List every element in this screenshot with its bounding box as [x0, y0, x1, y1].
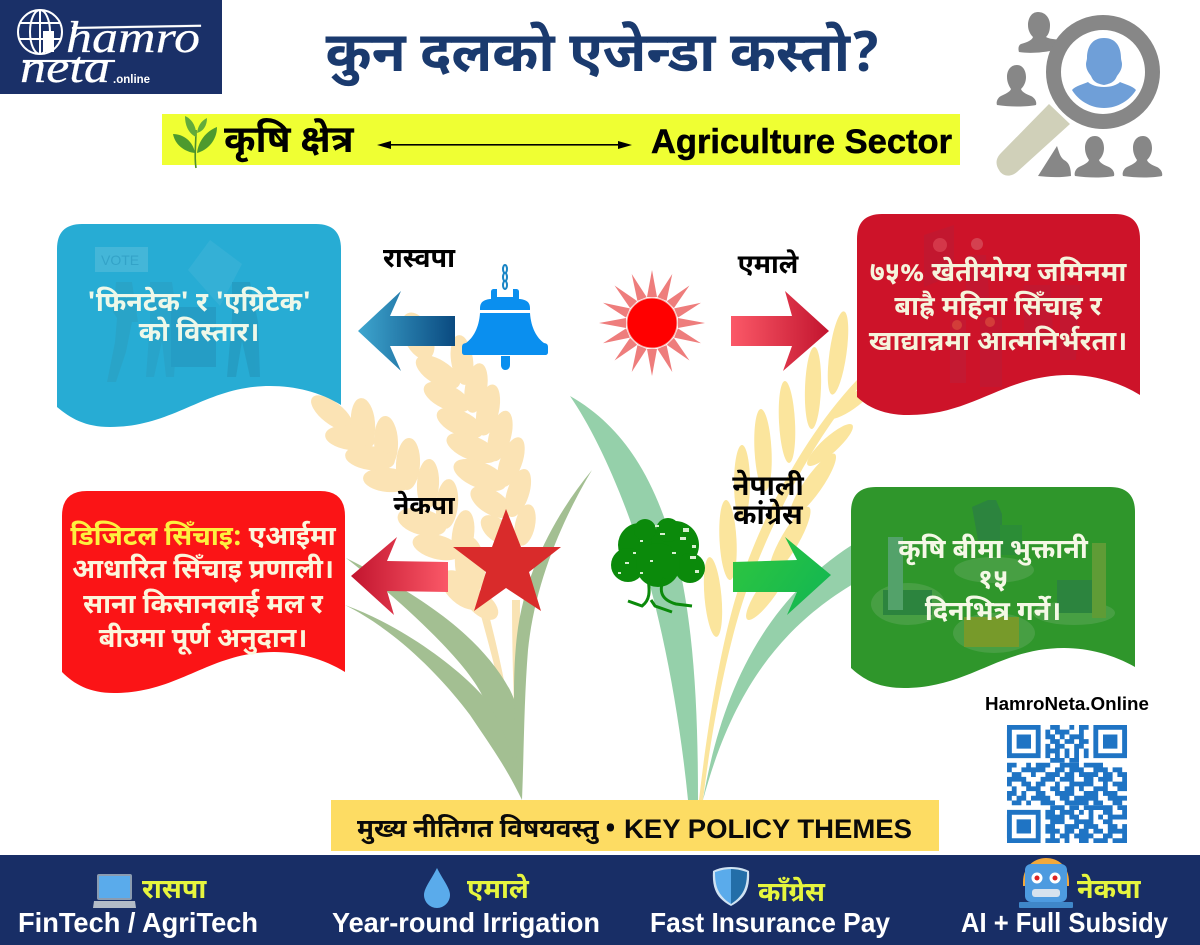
icon: star: [453, 509, 561, 611]
footer item: UML: [332, 868, 600, 938]
left wheat stalks: [478, 600, 520, 760]
label: Congress: कांग्रेस: [733, 497, 804, 536]
left wheat ear A: [396, 309, 538, 549]
panel text: 'फिनटेक' र 'एग्रिटेक': [87, 286, 311, 323]
right wheat stalk and grains: [699, 310, 875, 800]
icon: tree: [611, 518, 705, 612]
icon: bell: [462, 265, 548, 370]
panel text: बीउमा पूर्ण अनुदान।: [99, 622, 307, 659]
logo wordmark: hamro: [66, 13, 200, 62]
sector banner: [162, 114, 960, 168]
background wheat and leaf plant: [307, 309, 875, 800]
logo wordmark: [20, 13, 201, 92]
label: NCP: नेकपा: [393, 491, 456, 525]
footer item: NCP: AI + Full Subsidy: [961, 907, 1168, 938]
icon: leaf sprout: [173, 116, 217, 168]
logo banner: [0, 0, 222, 94]
QR code: [1007, 727, 1127, 841]
footer item: Congress: [650, 867, 890, 938]
icon: water drop: [424, 868, 450, 908]
panel text: बाह्रै महिना सिँचाइ र: [894, 290, 1103, 327]
footer item: RSP: रासपा: [142, 875, 207, 910]
logo wordmark: .online: [113, 74, 150, 86]
arrow: RSP: [358, 291, 455, 371]
panel text: [898, 534, 1089, 632]
olive leaves: [345, 470, 592, 800]
panel text: आधारित सिँचाइ प्रणाली।: [72, 553, 334, 590]
sector heading English: Agriculture Sector: [651, 123, 952, 161]
footer item: NCP: नेकपा: [1077, 873, 1142, 910]
icon: sun: [599, 270, 705, 376]
footer item: Congress: Fast Insurance Pay: [650, 907, 890, 938]
left wheat ear B: [307, 390, 502, 624]
faded vote illustration: VOTE: [101, 252, 139, 268]
panel: NCP: [62, 491, 345, 693]
footer item: Congress: काँग्रेस: [758, 876, 826, 913]
footer item: RSP: [18, 874, 258, 938]
footer item: RSP: FinTech / AgriTech: [18, 907, 258, 938]
panel text: कृषि बीमा भुक्तानी: [898, 534, 1089, 570]
footer item: UML: एमाले: [467, 873, 530, 910]
double arrow: [377, 141, 632, 149]
faded vote illustration: [95, 240, 260, 382]
panel text: [87, 286, 311, 353]
icon: laptop: [93, 874, 136, 908]
panel text: साना किसानलाई मल र: [83, 588, 324, 625]
panel: Congress: [851, 487, 1135, 688]
arrow: Congress: [733, 537, 831, 615]
label: Congress: [732, 468, 805, 536]
label: RSP: रास्वपा: [383, 244, 456, 279]
logo wordmark: neta: [20, 43, 110, 92]
panel text: दिनभित्र गर्ने।: [925, 595, 1061, 632]
panel text: डिजिटल सिँचाइ: एआईमा: [70, 520, 337, 557]
icon: robot: [1019, 858, 1073, 908]
arrow: UML: [731, 291, 829, 371]
key policy themes band: KEY POLICY THEMES: [624, 814, 912, 844]
green leaves: [570, 396, 860, 800]
key policy themes band: मुख्य नीतिगत विषयवस्तु •: [357, 814, 615, 848]
logo globe: [18, 10, 62, 54]
website label: HamroNeta.Online: [985, 694, 1149, 714]
panel text: ७५% खेतीयोग्य जमिनमा: [870, 256, 1127, 293]
magnifier people icon: [997, 12, 1162, 178]
panel text: को विस्तार।: [139, 317, 259, 353]
footer bar: [0, 855, 1200, 945]
label: Congress: नेपाली: [732, 468, 805, 507]
footer item: UML: Year-round Irrigation: [332, 907, 600, 938]
title: कुन दलको एजेन्डा कस्तो?: [326, 20, 880, 94]
footer item: NCP: [961, 858, 1168, 938]
label: UML: एमाले: [738, 248, 799, 284]
icon: shield: [713, 867, 749, 906]
key policy themes band: [331, 800, 939, 851]
panel text: [70, 520, 337, 659]
panel: RSP: [57, 224, 341, 427]
sector heading Nepali: कृषि क्षेत्र: [224, 117, 355, 168]
panel text: १५: [978, 565, 1008, 600]
panel text: खाद्यान्नमा आत्मनिर्भरता।: [869, 325, 1127, 362]
arrow: NCP: [351, 537, 448, 615]
faded family illustration: [871, 500, 1115, 653]
panel: UML: [857, 214, 1140, 415]
faded people illustration: [924, 225, 1080, 387]
panel text: [869, 256, 1127, 362]
